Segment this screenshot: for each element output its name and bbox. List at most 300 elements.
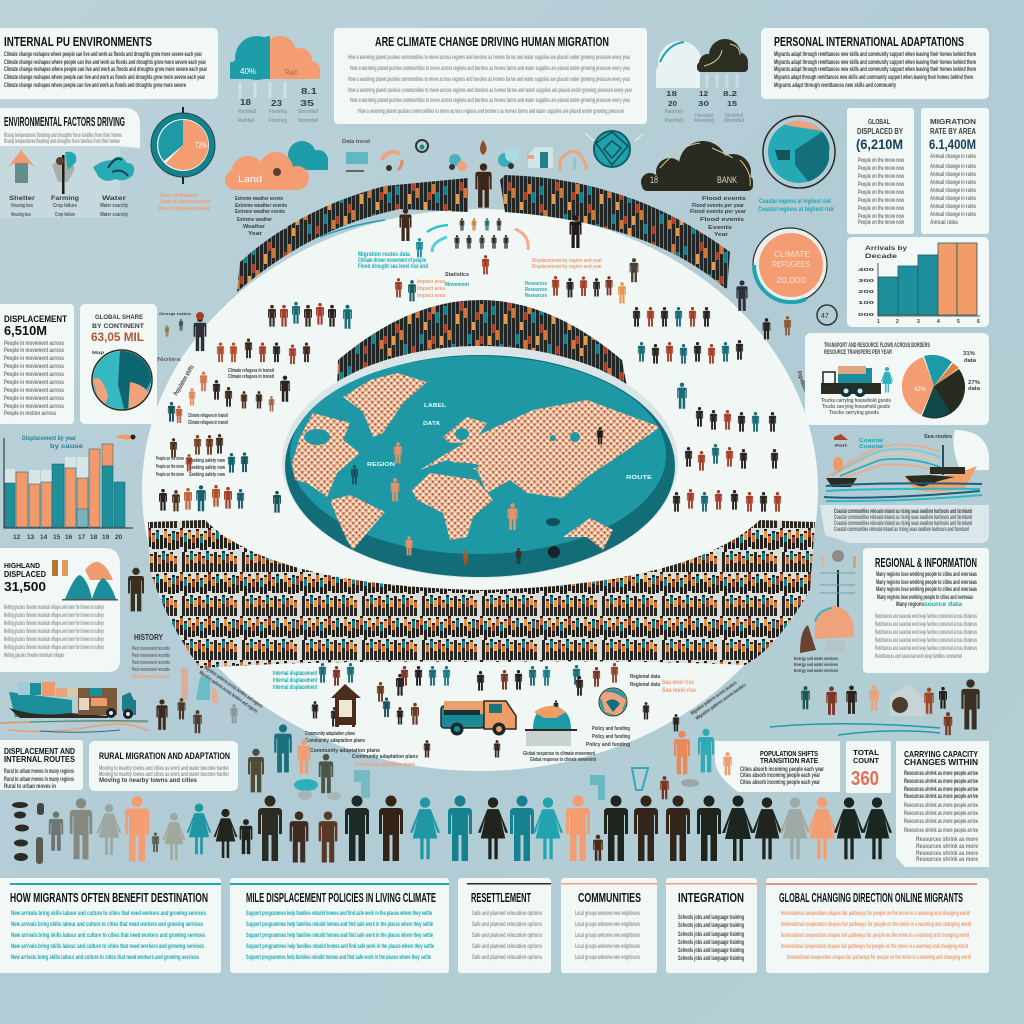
panel: lower left wide: Moving to nearby towns and cities: [99, 777, 197, 784]
panel: top left intro: Climate change reshapes where people can live and work as floods and droughts grow more severe each year: [4, 59, 206, 66]
pie chart: data: [968, 386, 980, 392]
figure beside left panels: Notes: [157, 357, 181, 363]
stage captions: Migration patterns across borders and regions: [203, 665, 264, 710]
figure: 6.1,400M: [929, 136, 976, 152]
figure beside left panels: [157, 311, 206, 363]
figure: large man: [961, 679, 980, 730]
icon: cargo ship left: [0, 682, 148, 732]
cloud: teal and orange top left: Rain: [285, 68, 298, 77]
axis labels: 20: [115, 534, 123, 541]
cloud: teal and orange top left: 23: [271, 99, 283, 108]
panel: 360 stat: COUNT: [853, 758, 880, 765]
panel: truck and pie: TRANSPORT AND RESOURCE FLOWS ACROSS BORDERS: [824, 342, 930, 349]
axis labels: 200: [858, 289, 875, 294]
stage captions: Internal displacement: [273, 677, 318, 684]
cloud: dark lower right: Flood events: [702, 196, 746, 202]
axis labels: 18: [90, 534, 98, 541]
panel: statistic A: DISPLACED BY: [857, 127, 904, 136]
stage captions: Impact area: [417, 286, 445, 292]
stage captions: Migration patterns across borders: [695, 682, 747, 722]
figure: (6,210M: [856, 136, 903, 152]
cloud: white and dark top right: Flooding: [695, 113, 713, 119]
captions: [9, 195, 128, 218]
stage captions: Seeking safety now: [189, 472, 225, 478]
panel: right tall: Resources shrink as more people arrive: [904, 818, 978, 825]
pie gauge: top left: [151, 107, 215, 212]
stage captions: Community adaptation plans: [352, 754, 418, 760]
cloud: teal and orange top left: Stormfall: [298, 118, 319, 124]
cloud: teal and orange top left: [230, 36, 320, 124]
cloud: dark lower right: Flood events: [700, 217, 744, 223]
panel: right tall: CHANGES WITHIN: [904, 757, 978, 767]
figure: 6,510M: [4, 323, 47, 338]
panel: statistic B: Annual change in rates: [930, 203, 976, 210]
main white ellipse stage: [142, 209, 818, 771]
panel: lower left small: Rural to urban moves in many regions: [4, 768, 74, 775]
panel: bottom 2: Support programmes help families rebuild homes and find safe work in the places where they settle: [246, 943, 434, 950]
icon: cargo boat: [905, 445, 977, 492]
panel: bottom 4 communities: COMMUNITIES: [578, 891, 641, 905]
panel: statistic A: People on the move now: [858, 205, 905, 212]
continents: [292, 373, 660, 550]
dome icon: [525, 706, 577, 746]
badge: orange circle: 20,000: [776, 276, 807, 285]
heading: INTERNAL PU ENVIRONMENTS: [4, 35, 152, 49]
row of people pictograms: [12, 796, 892, 864]
cloud: white and dark top right: Flooding: [694, 118, 714, 124]
crowd: top right arc: [500, 175, 730, 290]
pie chart: [902, 351, 981, 418]
stage captions: Global response to climate movement: [523, 751, 595, 757]
panel: statistic B: [921, 108, 989, 234]
left stage rows: [268, 305, 276, 327]
panel: right tall: Resources shrink as more: [916, 843, 978, 850]
text: Melting glaciers threaten mountain villages and water for farmers in valleys: [4, 604, 104, 611]
cloud: white and dark top right: Rainfall: [665, 109, 684, 115]
panel: bottom 2: [230, 878, 449, 973]
icon: power pole and dome: Energy and water services: [794, 656, 838, 661]
cloud: white and dark top right: 30: [698, 101, 709, 108]
map labels: ROUTE: [626, 475, 653, 481]
panel: top left intro: Climate change reshapes where people can live and work as floods and droughts grow more severe each year: [4, 74, 205, 81]
captions: Crop failure: [55, 212, 75, 218]
panel: right tall: Resources shrink as more people arrive: [904, 770, 978, 777]
crowd: inner arc above the map: [337, 300, 628, 392]
panel: number callouts right: Cities absorb incoming people each year: [740, 766, 824, 773]
stage captions: Internal displacement: [273, 670, 318, 677]
panel: bottom 3: RESETTLEMENT: [471, 891, 531, 905]
cloud: white and dark top right: Stormfall: [724, 118, 745, 124]
panel: top center title: How a warming planet pushes communities to move across regions and borders as homes farms and water supplies are placed under growing pressure every year: [350, 97, 630, 104]
icon: power pole and dome: Energy and water services: [794, 668, 838, 673]
cloud: teal and orange top left: 35: [300, 99, 315, 108]
panel: left statistics: DISPLACEMENT: [4, 314, 67, 324]
crowd: top left arc: [237, 178, 468, 292]
panel: number callouts right: POPULATION SHIFTS: [760, 751, 818, 758]
panel: regional information: [863, 548, 989, 673]
panel: lower left wide: [89, 741, 238, 791]
axis labels: 13: [27, 534, 35, 541]
panel: bottom 1: New arrivals bring skills labour and culture to cities that need workers and growing services: [11, 932, 205, 939]
panel: bottom 5: Schools jobs and language training: [678, 955, 744, 962]
globe: top right: [758, 116, 845, 213]
stage captions: Flood drought sea level rise and: [358, 263, 428, 270]
cloud: orange with teal behind: Extreme weather events: [235, 196, 283, 202]
panel: mountains statistic: HIGHLAND: [4, 563, 40, 570]
panel: top left intro: Climate change reshapes where people can live and work as floods and droughts grow more severe each year: [4, 51, 202, 58]
panel: truck and pie: Trucks carrying household goods: [821, 398, 891, 404]
panel: boat with route arcs: Coastal: [859, 438, 884, 444]
panel: right tall: Resources shrink as more people arrive: [904, 810, 978, 817]
panel: top left intro: Climate change reshapes where people can live and work as floods and droughts grow more severe each year: [4, 66, 207, 73]
panel: truck and pie: Trucks carrying goods: [829, 410, 879, 416]
bars: [878, 243, 977, 315]
truck icon: [441, 701, 516, 736]
bar chart left: by cause: [50, 443, 83, 450]
bar chart left: [4, 434, 136, 541]
axis labels: [858, 267, 980, 325]
stage captions: Migration routes data: [358, 251, 410, 258]
scene: people on lower right shore: [770, 679, 980, 735]
stage captions: People on the move: [156, 472, 184, 478]
captions: Shelter: [9, 195, 36, 202]
axis labels: 400: [858, 267, 875, 272]
pie gauge: top left: 72%: [195, 141, 207, 150]
panel: left statistics: People in movement across: [4, 340, 64, 347]
stage captions: Migration patterns across borders: [690, 680, 738, 717]
cloud: white and dark top right: 12: [699, 91, 708, 98]
panel: left statistics: People in motion across: [4, 410, 56, 417]
panel: bottom 5: INTEGRATION: [678, 891, 744, 905]
panel: mountains statistic: DISPLACED: [4, 570, 46, 579]
panel: left statistics: [0, 304, 74, 424]
stage captions: Climate refugees in transit: [228, 368, 274, 374]
panel: right tall: Resources shrink as more: [916, 850, 978, 857]
panel: bottom 1: New arrivals bring skills labour and culture to cities that need workers and growing services: [11, 943, 204, 950]
bar chart left: Displacement by year: [22, 435, 76, 442]
icon: map blob: [93, 157, 134, 181]
panel: boat with route arcs: Sea routes: [924, 434, 952, 440]
panel: bottom 2: Support programmes help families rebuild homes and find safe work in the places where they settle: [246, 921, 433, 928]
cloud: white and dark top right: Stormfall: [725, 113, 744, 119]
panel: mountains statistic: Melting glaciers threaten mountain villages: [4, 652, 64, 659]
badge: orange circle: [736, 228, 837, 339]
panel: statistic A: People on the move now: [858, 157, 905, 164]
panel: statistic B: MIGRATION: [930, 119, 976, 126]
panel: statistic B: Annual change in rates: [930, 187, 976, 194]
cloud: teal and orange top left: Stormfall: [298, 109, 319, 115]
panel: left statistics: People in movement across: [4, 355, 64, 362]
icon: tree: [52, 152, 76, 194]
panel: bottom 2: MILE DISPLACEMENT POLICIES IN LIVING CLIMATE: [246, 891, 436, 905]
panel: bottom 6 global: [766, 878, 989, 973]
text: Melting glaciers threaten mountain villages and water for farmers in valleys: [4, 620, 104, 627]
panel: lower left wide: RURAL MIGRATION AND ADAPTATION: [99, 751, 230, 761]
panel: boat with route arcs: [820, 430, 989, 543]
panel: bottom 1: New arrivals bring skills labour and culture to cities that need workers and growing services: [11, 954, 199, 961]
map figures: [351, 427, 603, 565]
map labels: LABEL: [424, 403, 446, 409]
icon: small boat: [826, 478, 857, 487]
stage captions: Displacement by region and year: [532, 264, 602, 270]
stage captions: Resources: [525, 281, 547, 287]
stage captions: Climate refugees in transit: [228, 374, 274, 380]
lower stage people: [331, 707, 338, 727]
panel: bottom 2: Support programmes help families rebuild homes and find safe work in the places where they settle: [246, 910, 432, 917]
panel: bottom 3: Safe and planned relocation options: [472, 910, 542, 917]
panel: statistic A: People on the move now: [858, 173, 905, 180]
captions: Housing loss: [11, 203, 33, 209]
panel: top center title: How a warming planet pushes communities to move across regions and borders as homes farms and water supplies are placed under growing pressure every year: [348, 87, 632, 94]
axis labels: 17: [78, 534, 86, 541]
stage captions: Community adaptation plans: [355, 762, 415, 768]
panel: statistic A: People on the move now: [858, 197, 905, 204]
panel: right tall: Resources shrink as more people arrive: [904, 786, 978, 793]
axis labels: 3: [917, 319, 920, 325]
panel: statistic A: People on the move now: [858, 219, 905, 226]
axis labels: [13, 534, 123, 541]
captions: Housing loss: [11, 212, 31, 218]
panel: environmental factors with icons: [0, 108, 140, 218]
panel: boat with route arcs: Port: [835, 443, 848, 448]
panel: statistic B: Annual change in rates: [930, 179, 976, 186]
panel: left statistics: People in movement across: [4, 371, 64, 378]
stage captions: [156, 220, 813, 768]
stage captions: Regional data: [630, 682, 660, 688]
stage captions: Climate refugees in transit: [188, 420, 228, 426]
panel: lower left small: DISPLACEMENT AND: [4, 747, 75, 756]
figure: 63,05 MIL: [91, 330, 144, 344]
badge: orange circle: CLIMATE: [774, 250, 810, 259]
crowd: lower crescent: [148, 520, 815, 668]
panel: regional information: source data: [924, 601, 962, 608]
panel: statistic B: Annual change in rates: [930, 153, 976, 160]
panel: left statistics: People in movement across: [4, 379, 64, 386]
waves: [0, 721, 148, 732]
small globe icon: [599, 688, 627, 716]
stage captions: Resources: [525, 293, 547, 299]
figure and notes beside mountains: Past movement records: [132, 667, 170, 673]
cloud: orange with teal behind: Extreme weather events: [235, 203, 287, 209]
panel: environmental factors with icons: Rising temperatures flooding and droughts force families from their homes: [4, 138, 120, 145]
figure and notes beside mountains: Past movement records: [132, 653, 170, 659]
panel: statistic A: People on the move now: [858, 213, 905, 220]
panel: bottom 5: Schools jobs and language training: [678, 939, 744, 946]
panel: bottom 3: Safe and planned relocation options: [472, 954, 542, 961]
bars: [5, 444, 125, 527]
panel: right tall: Resources shrink as more people arrive: [904, 802, 978, 809]
icon: mountains: [52, 560, 118, 600]
panel: truck and pie: [805, 333, 989, 425]
panel: statistic B: RATE BY AREA: [930, 127, 976, 136]
panel: statistic A: [847, 108, 914, 234]
pie chart: 27%: [968, 380, 981, 386]
panel: top center title: [334, 28, 647, 124]
stage captions: People on the move: [156, 464, 184, 470]
pie chart: 42%: [914, 387, 927, 393]
panel: number callouts right: [715, 741, 840, 792]
panel: left globe: [80, 304, 157, 424]
stage captions: Impact area: [417, 293, 445, 299]
text: Melting glaciers threaten mountain villages and water for farmers in valleys: [4, 612, 104, 619]
panel: top center title: How a warming planet pushes communities to move across regions and borders as homes farms and water supplies are placed under growing pressure: [358, 108, 624, 115]
panel: bottom 5: [666, 878, 757, 973]
panel: bottom 1: [0, 878, 221, 973]
cloud: orange with teal behind: Extreme weather events: [235, 209, 285, 215]
figure and notes beside mountains: Past movement records: [132, 646, 170, 652]
panel: bottom 5: Schools jobs and language training: [678, 922, 744, 929]
panel: lower left small: [0, 740, 83, 790]
stage captions: Seeking safety now: [189, 458, 225, 464]
panel: 360 stat: TOTAL: [853, 750, 880, 757]
cloud: dark lower right: Flood events per year: [690, 209, 746, 215]
panel: bottom 1: New arrivals bring skills labour and culture to cities that need workers and growing services: [11, 910, 206, 917]
globe: top right: Coastal regions at highest risk: [759, 198, 831, 205]
panel: left globe: BY CONTINENT: [92, 323, 144, 330]
stage captions: Community adaptation plans: [305, 738, 365, 744]
panel: top center title: How a warming planet pushes communities to move across regions and borders as homes farms and water supplies are placed under growing pressure every year: [348, 54, 630, 61]
world map: [282, 346, 678, 578]
panel: left globe: GLOBAL SHARE: [95, 314, 144, 321]
figure and notes beside mountains: HISTORY: [134, 633, 164, 642]
panel: bottom 3: Safe and planned relocation options: [472, 932, 542, 939]
stage captions: Impact area: [417, 279, 445, 285]
cloud: white and dark top right: 20: [668, 101, 677, 108]
panel: number callouts right: Cities absorb incoming people each year: [740, 779, 820, 786]
right stage rows: [633, 307, 640, 327]
panel: statistic A: People on the move now: [858, 189, 905, 196]
axis labels: 12: [13, 534, 21, 541]
panel: bottom 5: Schools jobs and language training: [678, 914, 744, 921]
panel: bottom 2: Support programmes help families rebuild homes and find safe work in the places where they settle: [246, 932, 433, 939]
axis labels: 15: [53, 534, 61, 541]
panel: bottom 4 communities: Local groups welcome new neighbours: [575, 910, 640, 917]
stage captions: Statistics: [445, 272, 469, 278]
pie gauge: top left: Share of displaced people: [158, 206, 210, 212]
text: Melting glaciers threaten mountain villages and water for farmers in valleys: [4, 644, 104, 651]
axis labels: 6: [977, 319, 980, 325]
axis labels: 5: [957, 319, 960, 325]
panel: lower left wide: Moving to nearby towns and cities as work and water become harder: [99, 771, 229, 778]
panel: top right: [761, 28, 989, 99]
cloud: dark lower right: [641, 141, 753, 238]
stage captions: Sea level rise: [662, 687, 696, 694]
panel: left statistics: People in movement across: [4, 403, 64, 410]
cloud: white and dark top right: 15: [727, 101, 737, 108]
panel: left statistics: People in movement across: [4, 347, 64, 354]
axis labels: 4: [937, 319, 940, 325]
panel: right tall: Resources shrink as more: [916, 856, 978, 863]
stage captions: Policy and funding: [592, 734, 630, 740]
text: Melting glaciers threaten mountain villages and water for farmers in valleys: [4, 636, 104, 643]
badge: orange circle: 47: [821, 313, 829, 320]
number: 360: [851, 768, 879, 790]
stage captions: Global response to climate movement: [530, 757, 596, 763]
cloud: white and dark top right: 18: [666, 91, 677, 98]
stage captions: Resources: [525, 287, 547, 293]
cloud: dark lower right: Year: [714, 232, 728, 238]
panel: bottom 1: HOW MIGRANTS OFTEN BENEFIT DESTINATION: [10, 891, 208, 905]
axis labels: 19: [102, 534, 110, 541]
cloud: orange with teal behind: Land: [238, 174, 262, 184]
pale bar caps: [5, 457, 88, 484]
panel: mountains statistic: [0, 548, 120, 672]
row of small icons under title: Data trend: [342, 139, 370, 145]
panel: right tall: Resources shrink as more people arrive: [904, 793, 978, 800]
panel: top left intro: [0, 28, 218, 99]
stage captions: People on the move: [156, 456, 184, 462]
heading: ENVIRONMENTAL FACTORS DRIVING: [4, 115, 125, 129]
cloud: dark lower right: Flood events per year: [692, 203, 744, 209]
figure: 31,500: [4, 579, 46, 594]
panel: right tall: Resources shrink as more people arrive: [904, 778, 978, 785]
panel: bar chart right: [847, 237, 989, 327]
panel: top center title: How a warming planet pushes communities to move across regions and borders as homes farms and water supplies are placed under growing pressure every year: [350, 65, 630, 72]
cloud: white and dark top right: Rainfall: [665, 118, 684, 124]
panel: bottom 3: [458, 878, 551, 973]
panel: bar chart right: Decade: [865, 253, 898, 260]
captions: Farming: [51, 195, 79, 202]
cloud: dark lower right: Events: [708, 225, 732, 231]
panel: right tall: [896, 741, 989, 867]
map labels: DATA: [423, 421, 440, 427]
stage captions: Sea level rise: [662, 679, 694, 686]
sparse people on the stage: [159, 208, 781, 758]
cloud: orange with teal behind: Extreme weather: [237, 217, 272, 223]
title: ARE CLIMATE CHANGE DRIVING HUMAN MIGRATION: [375, 34, 609, 49]
cloud: teal and orange top left: 40%: [240, 67, 256, 76]
panel: left statistics: People in movement across: [4, 395, 64, 402]
globe: top right: Coastal regions at highest risk: [758, 206, 834, 213]
cloud: white and dark top right: 8.2: [723, 91, 737, 98]
panel: bottom 4 communities: Local groups welcome new neighbours: [575, 932, 640, 939]
stage captions: Internal displacement: [273, 684, 318, 691]
cloud: orange with teal behind: Weather: [243, 224, 265, 230]
figure and notes beside mountains: Past movement records: [132, 660, 170, 666]
stage captions: Movement: [445, 282, 469, 288]
figure beside left panels: Group notes: [159, 311, 192, 316]
sparse row under crescent: [319, 663, 326, 683]
text: Melting glaciers threaten mountain villages and water for farmers in valleys: [4, 628, 104, 635]
panel: environmental factors with icons: Rising temperatures flooding and droughts force families from their homes: [4, 132, 122, 139]
figures above the main row: [248, 724, 714, 800]
panel: left statistics: People in movement across: [4, 363, 64, 370]
stage captions: Population shifts: [795, 370, 813, 405]
axis labels: 16: [65, 534, 73, 541]
panel: top right: Migrants adapt through remittances new skills and community: [774, 82, 896, 89]
stage captions: Population shifts: [173, 364, 196, 397]
captions: Water scarcity: [100, 212, 128, 218]
badge: orange circle: REFUGEES: [772, 260, 810, 269]
map labels: REGION: [367, 462, 396, 468]
stage captions: Displacement by region and year: [532, 258, 602, 264]
cloud: orange with teal behind: Year: [248, 231, 262, 237]
cloud: teal and orange top left: Rainfall: [238, 118, 255, 124]
panel: bottom 1: New arrivals bring skills labour and culture to cities that need workers and growing services: [11, 921, 203, 928]
panel: bottom 4 communities: [561, 878, 657, 973]
panel: statistic A: People on the move now: [858, 165, 905, 172]
cloud: dark lower right: 18: [650, 175, 658, 185]
stage captions: Climate refugees in transit: [188, 413, 228, 419]
panel: bottom 3: Safe and planned relocation options: [472, 943, 542, 950]
figures beside ship: [156, 698, 238, 733]
row of small icons under title: [342, 131, 643, 208]
panel: lower left small: Rural to urban moves in many regions: [4, 776, 74, 783]
panel: truck and pie: Trucks carrying household goods: [822, 404, 890, 410]
map rim: [282, 346, 678, 578]
icon: power pole and dome: Energy and water services: [794, 662, 838, 667]
cloud: teal and orange top left: 8.1: [301, 87, 318, 96]
